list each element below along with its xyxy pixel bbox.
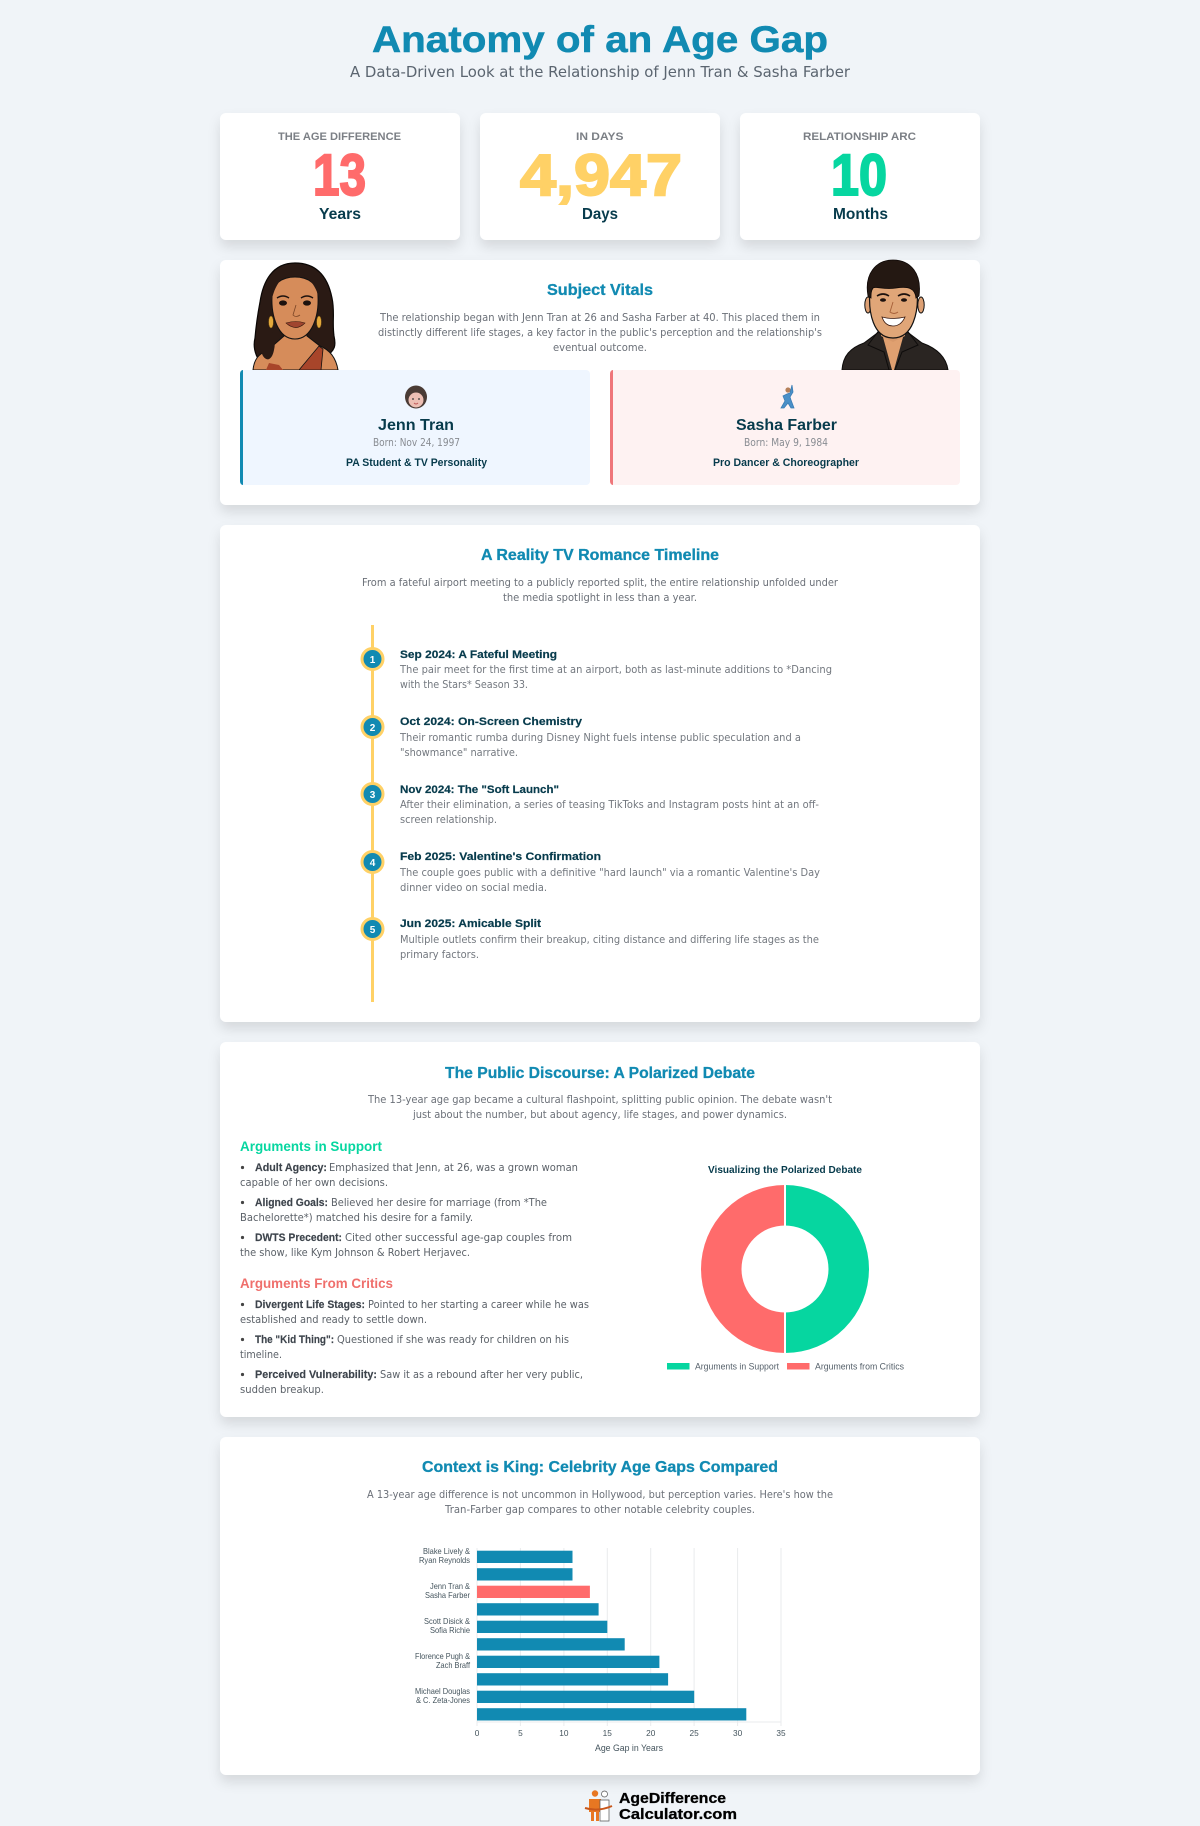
arguments in support: Arguments in Support: [240, 1139, 382, 1154]
text: timeline intro: the media spotlight in less than a year.: [503, 591, 697, 604]
donut chart: [667, 1165, 904, 1372]
text: discourse intro: [367, 1093, 832, 1121]
stat card: in days: Days: [582, 206, 618, 223]
card: Sasha Farber: Sasha Farber: [736, 417, 837, 434]
event 2: [362, 716, 801, 759]
event 3: screen relationship.: [400, 813, 497, 826]
arguments from critics: established and ready to settle down.: [240, 1313, 427, 1326]
icon: man dancing emoji: [781, 385, 794, 408]
panel: subject vitals: [220, 260, 980, 505]
event 1: [362, 648, 832, 691]
arguments in support: Bachelorette*) matched his desire for a family.: [240, 1211, 473, 1224]
arguments from critics: sudden breakup.: [240, 1383, 324, 1396]
text: discourse intro: The 13-year age gap became a cultural flashpoint, splitting public opinion. The debate wasn't: [367, 1093, 832, 1106]
y axis labels: Florence Pugh &: [415, 1651, 470, 1661]
arguments in support: DWTS Precedent:: [255, 1232, 342, 1244]
subtitle: A Data-Driven Look at the Relationship of Jenn Tran & Sasha Farber: [350, 63, 851, 81]
y axis labels: Ryan Reynolds: [419, 1555, 470, 1565]
event 4: [362, 851, 821, 894]
event 5: [362, 918, 819, 961]
arguments in support: capable of her own decisions.: [240, 1176, 388, 1189]
event 1: 1: [370, 655, 376, 666]
event 3: [362, 784, 819, 826]
stat card: relationship arc: Months: [833, 206, 888, 223]
footer logo: [585, 1790, 737, 1823]
icon: woman emoji: [405, 386, 427, 408]
icon: portrait of Sasha Farber: [842, 260, 948, 370]
heading: context is king: Context is King: Celebrity Age Gaps Compared: [422, 1459, 778, 1476]
text: context intro: [367, 1488, 833, 1516]
panel: timeline: [220, 525, 980, 1022]
stat card: in days: IN DAYS: [576, 131, 624, 143]
text: discourse intro: just about the number, but about agency, life stages, and power dynamics.: [412, 1108, 787, 1121]
stat card: age difference: THE AGE DIFFERENCE: [278, 131, 402, 143]
text: context intro: A 13-year age difference is not uncommon in Hollywood, but perception varies. Here's how the: [367, 1488, 833, 1501]
icon: portrait of Jenn Tran: [253, 263, 338, 370]
panel: celebrity comparison: [220, 1437, 980, 1775]
y axis labels: Jenn Tran &: [430, 1581, 470, 1591]
arguments from critics: Perceived Vulnerability:: [255, 1369, 377, 1381]
arguments from critics: timeline.: [240, 1348, 282, 1361]
y axis labels: Blake Lively &: [423, 1546, 470, 1556]
text: timeline intro: [362, 576, 839, 604]
text: vitals intro: distinctly different life stages, a key factor in the public's perception and the relationship's: [378, 326, 822, 339]
card: Jenn Tran: [240, 370, 590, 485]
legend: Arguments in Support: [695, 1362, 779, 1372]
stat card: relationship arc: [740, 113, 980, 240]
arguments from critics: The "Kid Thing":: [255, 1334, 334, 1346]
stat card: age difference: Years: [319, 206, 361, 223]
donut chart: Visualizing the Polarized Debate: [708, 1165, 862, 1176]
footer logo: Calculator.com: [619, 1806, 737, 1823]
event 3: Nov 2024: The "Soft Launch": [400, 784, 559, 796]
x axis labels: 0: [475, 1728, 480, 1738]
arguments in support: Emphasized that Jenn, at 26, was a grown woman: [329, 1161, 578, 1174]
event 4: Feb 2025: Valentine's Confirmation: [400, 851, 601, 863]
stat card: age difference: 13: [313, 143, 366, 208]
y axis labels: Sasha Farber: [425, 1590, 470, 1600]
x axis labels: [475, 1728, 786, 1753]
x axis labels: Age Gap in Years: [595, 1743, 663, 1753]
stat card: relationship arc: RELATIONSHIP ARC: [803, 131, 916, 143]
x axis labels: 15: [603, 1728, 612, 1738]
stat card: in days: [480, 113, 720, 240]
arguments from critics: Pointed to her starting a career while he was: [368, 1298, 589, 1311]
stat card: age difference: [220, 113, 460, 240]
card: Sasha Farber: [610, 370, 960, 485]
event 3: After their elimination, a series of teasing TikToks and Instagram posts hint at an off-: [400, 798, 819, 811]
panel: public discourse: [220, 1042, 980, 1417]
event 2: "showmance" narrative.: [400, 746, 518, 759]
y axis labels: Zach Braff: [436, 1660, 471, 1670]
x axis labels: 35: [776, 1728, 786, 1738]
text: vitals intro: [378, 311, 822, 354]
arguments in support: Aligned Goals:: [255, 1197, 328, 1209]
arguments in support: [240, 1139, 578, 1259]
x axis labels: 25: [689, 1728, 699, 1738]
arguments from critics: Saw it as a rebound after her very public,: [380, 1368, 583, 1381]
text: vitals intro: The relationship began with Jenn Tran at 26 and Sasha Farber at 40. This placed them in: [379, 311, 820, 324]
arguments from critics: Arguments From Critics: [240, 1276, 393, 1291]
legend: [667, 1362, 904, 1372]
event 2: Their romantic rumba during Disney Night fuels intense public speculation and a: [399, 731, 801, 744]
arguments in support: Believed her desire for marriage (from *The: [331, 1196, 547, 1209]
title: Anatomy of an Age Gap: [372, 19, 828, 60]
arguments in support: the show, like Kym Johnson & Robert Herjavec.: [240, 1246, 470, 1259]
x axis labels: 10: [559, 1728, 569, 1738]
text: vitals intro: eventual outcome.: [553, 341, 647, 354]
arguments from critics: Divergent Life Stages:: [255, 1299, 365, 1311]
card: Sasha Farber: Pro Dancer & Choreographer: [713, 457, 860, 469]
card: Jenn Tran: Born: Nov 24, 1997: [373, 437, 460, 449]
event 2: Oct 2024: On-Screen Chemistry: [400, 716, 583, 728]
event 1: Sep 2024: A Fateful Meeting: [400, 649, 557, 661]
y axis labels: Scott Disick &: [424, 1616, 470, 1626]
legend: Arguments from Critics: [815, 1362, 904, 1372]
stat card: relationship arc: 10: [831, 143, 887, 208]
footer logo: AgeDifference: [619, 1790, 726, 1807]
x axis labels: 20: [646, 1728, 656, 1738]
arguments from critics: [240, 1276, 589, 1396]
card: Jenn Tran: PA Student & TV Personality: [346, 457, 487, 469]
y axis labels: [415, 1546, 471, 1705]
event 4: dinner video on social media.: [400, 881, 547, 894]
timeline axis: [371, 625, 374, 1002]
event 3: 3: [370, 790, 376, 801]
y axis labels: Michael Douglas: [415, 1686, 470, 1696]
title: [350, 19, 851, 81]
heading: timeline: A Reality TV Romance Timeline: [481, 547, 719, 564]
event 1: The pair meet for the first time at an airport, both as last-minute additions to *Dancing: [399, 663, 832, 676]
event 4: The couple goes public with a definitive "hard launch" via a romantic Valentine's Day: [399, 866, 821, 879]
heading: subject vitals: Subject Vitals: [547, 282, 653, 299]
event 5: Multiple outlets confirm their breakup, citing distance and differing life stages as the: [400, 933, 819, 946]
x axis labels: 30: [733, 1728, 743, 1738]
y axis labels: & C. Zeta-Jones: [416, 1695, 470, 1705]
event 5: Jun 2025: Amicable Split: [400, 918, 541, 930]
bar chart: [415, 1546, 786, 1753]
arguments from critics: Questioned if she was ready for children on his: [337, 1333, 569, 1346]
arguments in support: Cited other successful age-gap couples from: [345, 1231, 572, 1244]
text: timeline intro: From a fateful airport meeting to a publicly reported split, the entire relationship unfolded under: [362, 576, 839, 589]
event 1: with the Stars* Season 33.: [400, 678, 528, 691]
icon: logo figures: [585, 1790, 612, 1821]
event 5: primary factors.: [400, 948, 479, 961]
y axis labels: Sofia Richie: [430, 1625, 470, 1635]
stat card: in days: 4,947: [520, 143, 682, 208]
event 2: 2: [370, 723, 376, 734]
arguments in support: Adult Agency:: [255, 1162, 327, 1174]
card: Sasha Farber: Born: May 9, 1984: [744, 437, 828, 449]
card: Jenn Tran: Jenn Tran: [378, 417, 454, 434]
event 4: 4: [370, 858, 376, 869]
x axis labels: 5: [518, 1728, 523, 1738]
heading: public discourse: The Public Discourse: A Polarized Debate: [445, 1065, 755, 1082]
event 5: 5: [370, 925, 376, 936]
text: context intro: Tran-Farber gap compares to other notable celebrity couples.: [444, 1503, 755, 1516]
